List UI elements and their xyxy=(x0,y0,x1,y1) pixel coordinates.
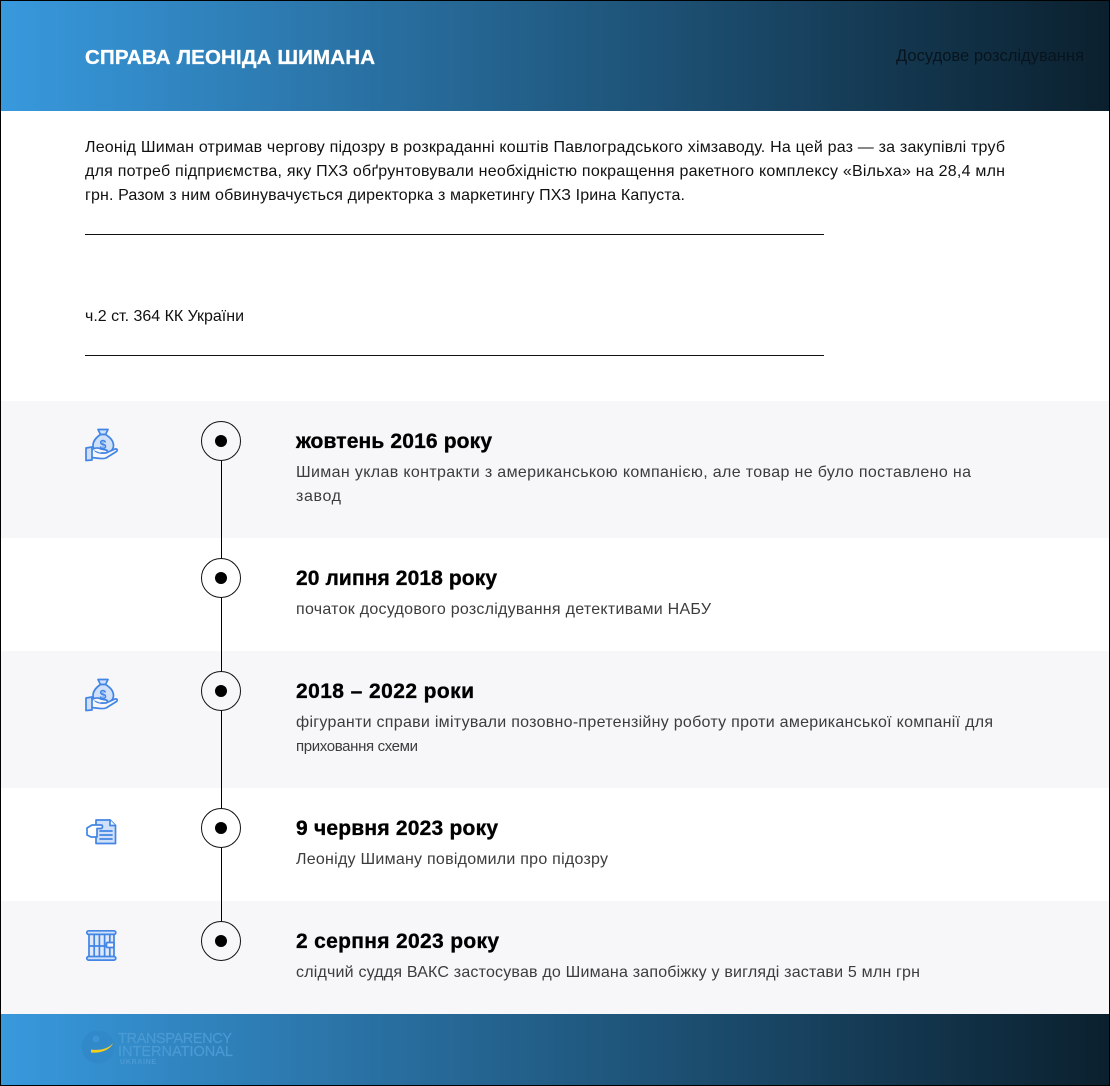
icon: money bag in hand xyxy=(86,430,117,460)
date: 2 серпня 2023 року xyxy=(296,930,499,953)
description: приховання схеми xyxy=(296,738,418,755)
description: Шиман уклав контракти з американською компанією, але товар не було поставлено на xyxy=(296,464,971,481)
timeline event: 2 August 2023 xyxy=(87,922,920,981)
icon: money bag in hand: $ xyxy=(100,438,107,452)
intro text block: грн. Разом з ним обвинувачується директорка з маркетингу ПХЗ Ірина Капуста. xyxy=(85,187,685,204)
marker xyxy=(202,808,240,848)
timeline event: October 2016 xyxy=(86,422,971,505)
header band xyxy=(0,0,1110,111)
icon: money bag in hand: $ xyxy=(100,688,107,702)
legal article: ч.2 ст. 364 КК України xyxy=(85,308,244,325)
description: початок досудового розслідування детективами НАБУ xyxy=(296,601,712,618)
title: СПРАВА ЛЕОНІДА ШИМАНА xyxy=(85,46,375,69)
intro text block: для потреб підприємства, яку ПХЗ обґрунтовували необхідністю покращення ракетного комплексу «Вільха» на 28,4 млн xyxy=(85,163,1005,180)
description: завод xyxy=(296,488,342,505)
icon: prison bars xyxy=(87,931,116,960)
logo: Transparency International Ukraine: TRANSPARENCY xyxy=(118,1031,232,1047)
date: жовтень 2016 року xyxy=(295,430,492,453)
timeline axis xyxy=(221,441,222,941)
date: 20 липня 2018 року xyxy=(296,567,497,590)
row backgrounds xyxy=(0,401,1110,1014)
timeline event: 2018–2022 xyxy=(86,672,993,755)
marker xyxy=(202,672,240,710)
description: слідчий суддя ВАКС застосував до Шимана запобіжку у вигляді застави 5 млн грн xyxy=(296,964,920,981)
marker xyxy=(202,422,240,460)
marker xyxy=(202,558,240,598)
description xyxy=(296,464,971,505)
description: Леоніду Шиману повідомили про підозру xyxy=(296,851,608,868)
intro text block xyxy=(85,139,1005,204)
icon: document handed over xyxy=(87,820,116,844)
marker xyxy=(202,922,240,960)
date: 9 червня 2023 року xyxy=(296,817,498,840)
intro text block: Леонід Шиман отримав чергову підозру в розкраданні коштів Павлоградського хімзаводу. На цей раз — за закупівлі труб xyxy=(85,139,1005,156)
logo: Transparency International Ukraine: UKRAINE xyxy=(120,1059,156,1066)
stage label: Досудове розслідування xyxy=(896,47,1084,65)
date: 2018 – 2022 роки xyxy=(296,680,474,703)
description xyxy=(296,714,993,755)
logo: Transparency International Ukraine: INTERNATIONAL xyxy=(118,1044,233,1060)
logo: Transparency International Ukraine xyxy=(82,1030,233,1066)
icon: money bag in hand xyxy=(86,680,117,710)
timeline event: 20 July 2018 xyxy=(202,558,712,618)
footer band xyxy=(0,1014,1110,1086)
timeline event: 9 June 2023 xyxy=(87,808,608,868)
description: фігуранти справи імітували позовно-претензійну роботу проти американської компанії для xyxy=(296,714,993,731)
